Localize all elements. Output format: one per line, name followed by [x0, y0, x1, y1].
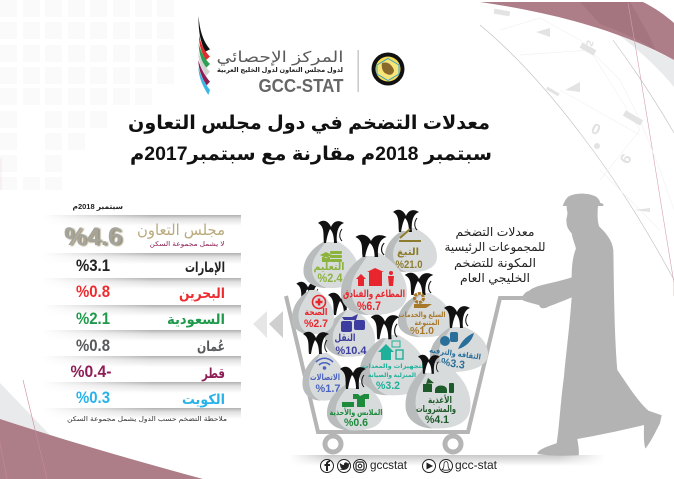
text block: component groups caption: المكونة للتضخم — [454, 256, 536, 271]
bag: food and drinks — [406, 355, 470, 428]
icon: twitter — [338, 460, 350, 472]
row: UAE: %3.1 — [76, 256, 110, 275]
table note: ملاحظة التضخم حسب الدول يشمل مجموعة السكن — [67, 416, 227, 423]
decoration: faint square grid top left — [0, 0, 174, 190]
floor shadow — [290, 455, 605, 466]
bag: communications: %1.7 — [316, 383, 340, 395]
bag: health: %2.7 — [304, 318, 328, 330]
row: Kuwait: %0.3 — [76, 388, 110, 407]
text block: component groups caption: للمجموعات الرئيسية — [444, 240, 546, 255]
bag: miscellaneous goods: السلع والخدمات — [398, 312, 446, 319]
bag: miscellaneous goods — [398, 273, 452, 337]
title: معدلات التضخم في دول مجلس التعاون — [128, 113, 490, 134]
bag: food and drinks: الأغذية — [428, 394, 452, 405]
icon: house and appliances — [378, 341, 403, 360]
bag: miscellaneous goods: %1.0 — [410, 325, 434, 337]
bag: household appliances: التجهيزات والمعدات — [362, 363, 426, 370]
table date: سبتمبر 2018م — [72, 202, 123, 211]
bag: food and drinks: %4.1 — [425, 414, 449, 426]
icon: facebook — [320, 460, 334, 472]
bag: tobacco — [385, 210, 437, 272]
handle: gccstat: gccstat — [370, 458, 408, 472]
row: Oman — [76, 336, 225, 355]
bag: restaurants and hotels — [341, 235, 407, 315]
icon: cigarette — [399, 229, 421, 241]
logo: GCC-STAT wordmark — [198, 16, 344, 96]
icon: wifi — [316, 358, 333, 369]
icon: food items — [423, 378, 454, 393]
decoration: top right maroon band and map lines: 0 — [588, 120, 603, 139]
row: Bahrain: %0.8 — [76, 282, 110, 301]
bag: communications — [302, 332, 346, 401]
icon: red cross — [312, 296, 326, 308]
row: GCC: مجلس التعاون — [137, 222, 225, 239]
bag: household appliances — [360, 315, 426, 395]
bag: food and drinks: والمشروبات — [416, 404, 456, 415]
bag: restaurants and hotels: %6.7 — [357, 299, 381, 313]
row: Kuwait — [76, 388, 225, 408]
bag: communications: الاتصالات — [310, 372, 340, 382]
icon: hotel and people — [356, 268, 394, 286]
arrows pointing to table — [253, 311, 283, 338]
text block: component groups caption: معدلات التضخم — [456, 225, 534, 239]
bag: household appliances: المنزلية والصيانة — [368, 372, 416, 379]
row: Saudi: السعودية — [167, 311, 225, 328]
row: Kuwait: الكويت — [182, 391, 225, 408]
row: Oman: عُمان — [197, 338, 225, 354]
logo Arabic name: المركز الإحصائي — [216, 49, 344, 67]
bag: health: الصحة — [304, 307, 328, 317]
row: Bahrain — [76, 282, 225, 302]
bag: tobacco: التبغ — [397, 247, 419, 258]
bag: restaurants and hotels: المطاعم والفنادق — [343, 289, 405, 300]
bag: clothing and footwear — [327, 367, 383, 430]
icon: instagram — [354, 460, 366, 472]
row: UAE — [76, 256, 225, 276]
bag: culture and recreation: %3.3 — [440, 356, 466, 372]
decoration: top right maroon band and map lines — [480, 2, 674, 296]
row: UAE: الإمارات — [185, 259, 225, 276]
row: Qatar: قطر — [201, 365, 225, 382]
bag: culture and recreation — [427, 306, 490, 375]
row: GCC: لا يشمل مجموعة السكن — [150, 241, 225, 248]
bag: clothing and footwear: %0.6 — [344, 417, 368, 429]
logo Arabic subtitle: لدول مجلس التعاون لدول الخليج العربية — [217, 67, 343, 74]
text block: component groups caption: الخليجي العام — [460, 271, 530, 285]
panel: country inflation table — [43, 202, 241, 423]
row: Qatar: %0.4- — [70, 362, 112, 381]
icon: gear and hand — [414, 294, 432, 308]
bag: transport — [325, 293, 375, 357]
bag: education — [304, 221, 358, 288]
title: سبتمبر 2018م مقارنة مع سبتمبر2017م — [130, 144, 492, 165]
icon: shirt and shoes — [342, 394, 369, 407]
cart wheels — [325, 436, 461, 452]
row: Saudi — [76, 309, 225, 328]
social media handles — [320, 458, 498, 472]
icon: plane, train and bus — [341, 314, 365, 332]
bag: education: %2.4 — [318, 273, 343, 285]
shopping cart — [286, 296, 527, 452]
bag: tobacco: %21.0 — [396, 259, 422, 271]
decoration: top right maroon band and map lines: 6 — [617, 151, 636, 167]
man silhouette pushing cart — [522, 194, 662, 456]
row: Saudi: %2.1 — [76, 309, 110, 328]
row: GCC: %4.6 — [64, 223, 122, 251]
bag: miscellaneous goods: المتنوعة — [414, 320, 440, 327]
row: GCC — [64, 222, 225, 251]
icon: youtube — [422, 460, 436, 472]
decoration: bottom left maroon band — [0, 158, 203, 479]
row: Bahrain: البحرين — [179, 285, 225, 302]
bag: household appliances: %3.2 — [376, 380, 400, 392]
row: Oman: %0.8 — [76, 336, 110, 355]
decoration: top right maroon band and map lines: 2 — [584, 39, 597, 48]
logo stripes — [198, 16, 210, 95]
divider — [358, 50, 359, 92]
row: Qatar — [70, 362, 225, 382]
bag: transport: النقل — [334, 333, 356, 344]
bag: transport: %10.4 — [336, 345, 367, 357]
bag: clothing and footwear: الملابس والأحذية — [330, 407, 383, 418]
row shading — [43, 215, 241, 420]
icon: masks and feather — [440, 332, 474, 349]
bag: culture and recreation: الثقافة والترفيه — [429, 345, 481, 362]
bag: education: التعليم — [314, 261, 344, 273]
title — [128, 113, 492, 165]
logo Latin name: GCC-STAT — [258, 76, 344, 96]
text block: component groups caption — [444, 225, 546, 285]
icon: snapchat — [440, 460, 452, 472]
logo: GCC emblem — [372, 52, 404, 86]
icon: books and cap — [320, 251, 342, 262]
bag: health — [292, 282, 334, 334]
cart frame — [286, 296, 527, 432]
handle: gcc-stat: gcc-stat — [455, 458, 498, 472]
